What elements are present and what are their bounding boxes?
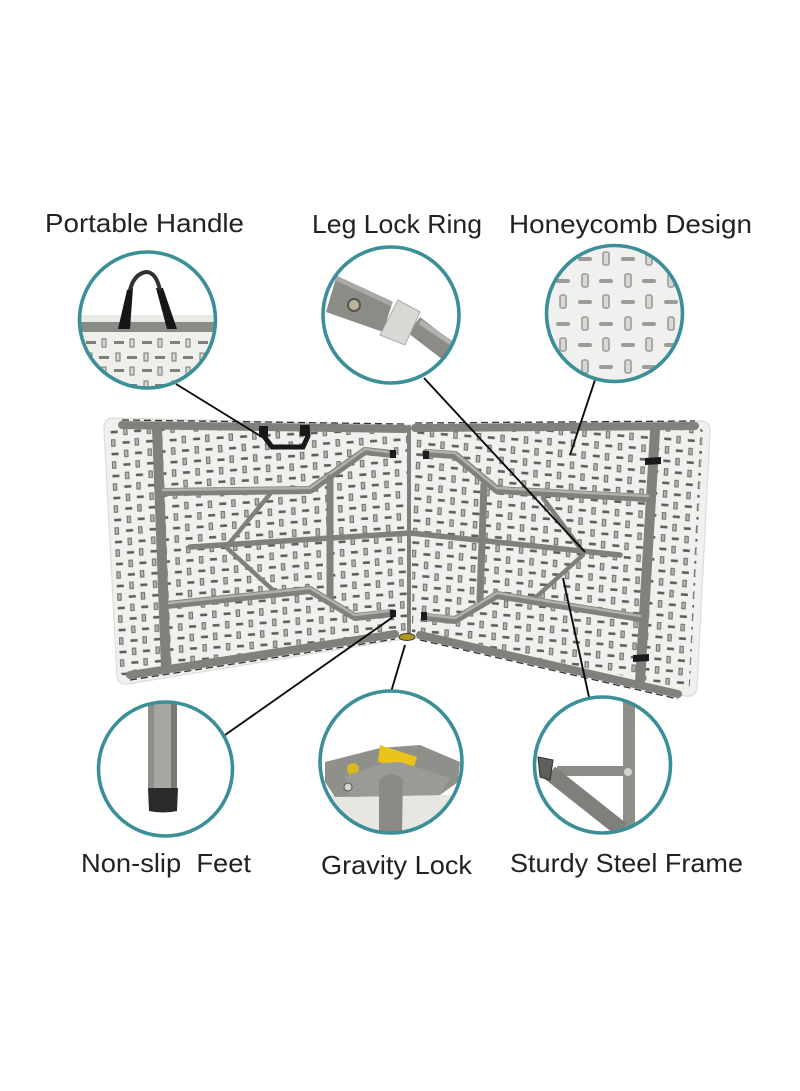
- carry handle on table: [259, 425, 308, 447]
- inset: gravity lock detail: [325, 745, 460, 832]
- table right panel: [410, 421, 710, 696]
- inset: handle detail: [81, 270, 214, 386]
- callout: gravity lock: [318, 690, 473, 880]
- inset: rubber foot: [148, 700, 178, 812]
- inset: lock ring detail: [326, 276, 452, 358]
- callout: sturdy steel frame: [510, 696, 743, 878]
- callout: portable handle: [45, 208, 244, 392]
- label: sturdy steel frame: Sturdy Steel Frame: [510, 848, 743, 878]
- inset: steel frame detail: [537, 702, 635, 831]
- steel frame right: [410, 421, 695, 699]
- folding table underside: [104, 418, 710, 699]
- label: gravity lock: Gravity Lock: [321, 850, 473, 880]
- label: portable handle: Portable Handle: [45, 208, 244, 238]
- gravity lock on table: [399, 634, 415, 640]
- leader lines: [176, 378, 595, 735]
- label: non-slip feet: Non-slip Feet: [81, 848, 252, 878]
- callout: honeycomb design: [509, 209, 752, 383]
- callout: non-slip feet: [81, 700, 252, 878]
- steel frame left: [122, 420, 410, 680]
- callout: leg lock ring: [312, 209, 482, 386]
- table left panel: [104, 418, 410, 684]
- inset: honeycomb texture: [546, 245, 684, 383]
- label: leg lock ring: Leg Lock Ring: [312, 209, 482, 239]
- label: honeycomb design: Honeycomb Design: [509, 209, 752, 239]
